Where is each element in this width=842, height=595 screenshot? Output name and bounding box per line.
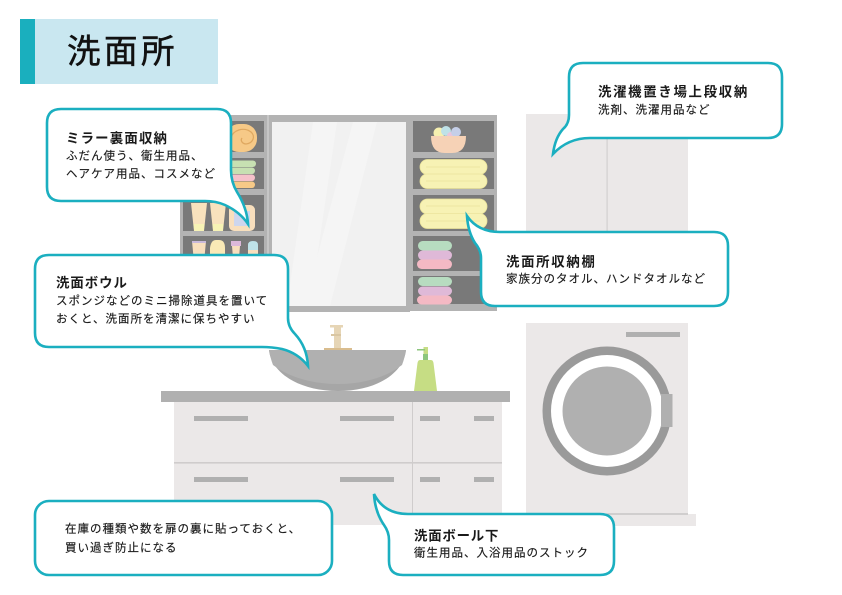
left shelf unit [180,115,267,310]
right shelf unit [410,115,497,311]
title banner: 洗面所 [67,34,178,71]
callout: mirror back storage: ミラー裏面収納 [66,130,168,146]
callout: upper storage above washer: 洗剤、洗濯用品など [598,104,710,116]
pastel folded towels [417,241,452,304]
stacked small towels [226,160,256,188]
callout: under wash bowl: 衛生用品、入浴用品のストック [414,546,589,560]
bowl with soaps [431,126,466,153]
callout: mirror back storage: ヘアケア用品、コスメなど [66,168,216,180]
callout: wash bowl: 洗面ボウル [56,276,128,290]
wash bowl [269,350,406,391]
callout: mirror back storage: ふだん使う、衛生用品、 [66,148,204,162]
soap dispenser [414,347,437,391]
callout: under wash bowl [374,494,614,575]
washing machine [526,323,696,526]
rolled towel [226,124,257,152]
callout: wash bowl [35,255,308,366]
callout: under wash bowl: 洗面ボール下 [414,528,499,544]
callout: mirror back storage [47,109,248,224]
large yellow towels [420,160,487,228]
callout: washroom storage shelf [467,216,728,306]
upper cabinet above washer [526,114,688,304]
callout: stock tip: 在庫の種類や数を扉の裏に貼っておくと、 [65,522,301,536]
bottles row [191,203,255,231]
callout: wash bowl: スポンジなどのミニ掃除道具を置いて [56,294,268,308]
callout: washroom storage shelf: 洗面所収納棚 [506,254,597,270]
callout: wash bowl: おくと、洗面所を清潔に保ちやすい [56,312,256,326]
faucet [324,325,352,350]
callout: upper storage above washer: 洗濯機置き場上段収納 [598,84,749,100]
callout: washroom storage shelf: 家族分のタオル、ハンドタオルなど [506,272,706,286]
callout: stock tip [35,501,332,575]
callout: stock tip: 買い過ぎ防止になる [65,540,178,554]
callout: upper storage above washer [553,63,782,154]
vanity cabinet [174,402,502,525]
counter top [161,391,510,402]
mirror [267,115,410,312]
title banner [20,19,218,84]
toiletries row [192,240,258,258]
